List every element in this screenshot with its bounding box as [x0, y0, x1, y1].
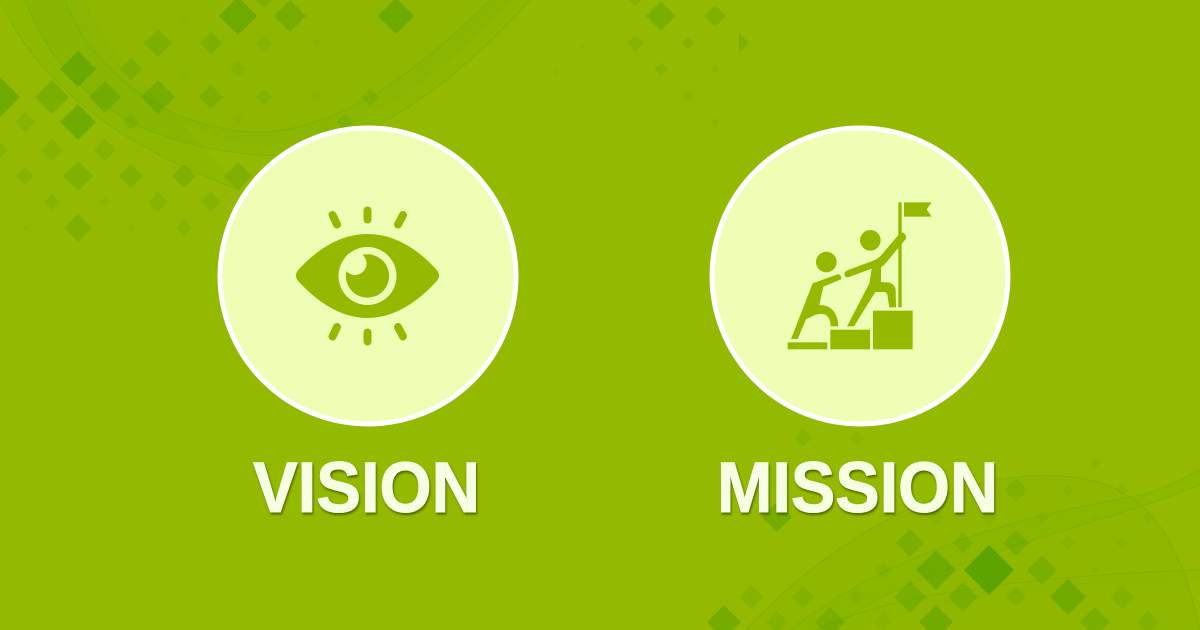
swoosh bands: bottom right	[745, 470, 1200, 630]
heading: mission: MISSION	[717, 449, 998, 528]
heading: vision: VISION	[253, 449, 480, 528]
mission circle	[712, 128, 1008, 424]
swoosh bands: top left	[0, 0, 530, 190]
icon: eye	[296, 210, 439, 342]
panel: vision	[220, 128, 516, 528]
diamond pattern: top left	[0, 0, 749, 242]
vision circle	[220, 128, 516, 424]
diamond pattern: bottom right	[707, 429, 1159, 630]
panel: mission	[712, 128, 1008, 528]
icon: climbers reaching flag	[788, 202, 932, 349]
